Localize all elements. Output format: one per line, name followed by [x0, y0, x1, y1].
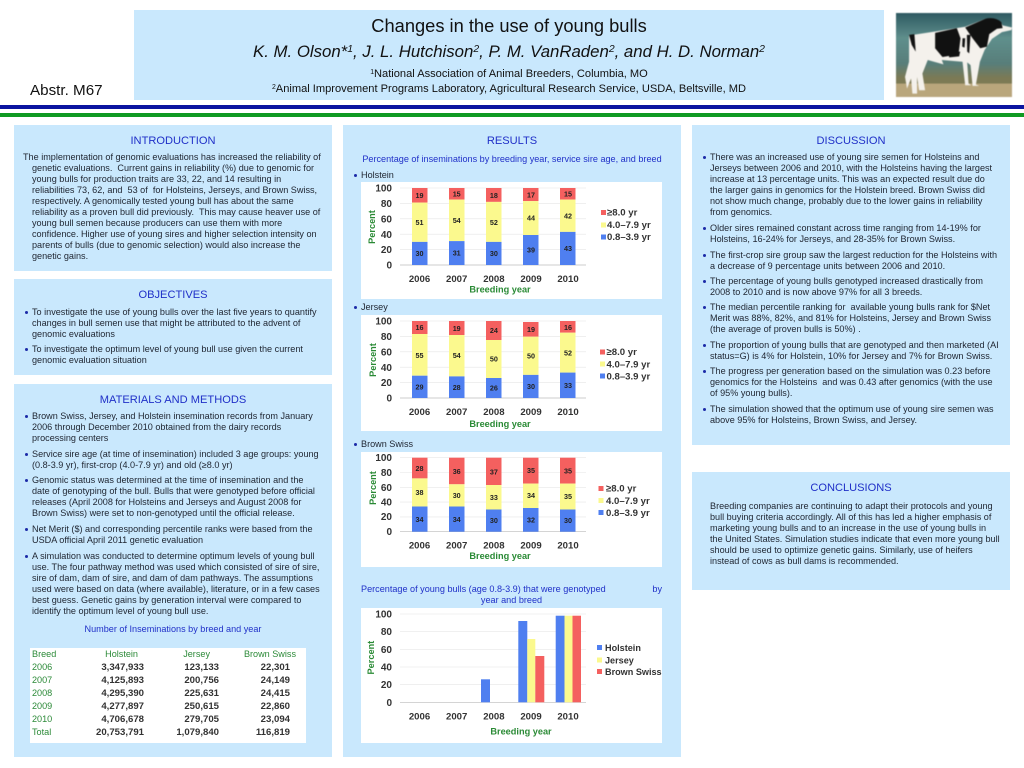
table: inseminations by breed and year — [30, 648, 306, 743]
stacked bar chart: Brown Swiss: 20 — [381, 512, 392, 523]
introduction text: reliability as a proven bull did previously. This may cause heaver use of — [32, 207, 320, 217]
method 5: A simulation was conducted to determine optimum levels of young bull — [32, 551, 315, 561]
table: inseminations by breed and year: 250,615 — [184, 701, 219, 712]
heading: discussion: DISCUSSION — [816, 135, 886, 147]
objective 2: genomic evaluation situation — [32, 355, 147, 365]
discussion point 1: not show much change, probably due to the lower gains in reliability — [710, 196, 982, 206]
stacked bar chart: Holstein: 52 — [490, 218, 498, 227]
introduction text — [23, 152, 321, 261]
header rule: green — [0, 113, 1024, 117]
panel: objectives — [14, 279, 332, 375]
discussion point 2: Holsteins, 16-24% for Jerseys, and 28-35% for Brown Swiss. — [710, 234, 955, 244]
stacked bar chart: Holstein: ≥8.0 yr — [607, 208, 638, 218]
introduction text: confidence. Higher use of young sires and higher selection intensity on — [32, 229, 317, 239]
stacked bar chart: Brown Swiss: 34 — [416, 515, 424, 524]
discussion point 1: There was an increased use of young sire semen for Holsteins and — [710, 152, 979, 162]
discussion point 1 — [710, 152, 992, 218]
stacked bar chart: Holstein: 15 — [453, 190, 461, 198]
panel: introduction — [14, 125, 332, 271]
method 5: sire of dam, dam of sire, and dam of dam pathways. The assumptions — [32, 573, 313, 583]
introduction text: respectively. A genomically tested young bull has about the same — [32, 196, 294, 206]
method 4 — [32, 524, 313, 546]
stacked bar chart: Holstein: 43 — [564, 244, 572, 253]
stacked bar chart: Jersey: 28 — [453, 383, 461, 392]
stacked bar chart: Brown Swiss: 100 — [375, 453, 392, 464]
stacked bar chart: Jersey: 54 — [453, 351, 461, 360]
stacked bar chart: Brown Swiss: 0 — [386, 527, 392, 538]
grouped bar chart: genotyped young bulls: 0 — [386, 698, 392, 709]
stacked bar chart: Holstein: 2010 — [557, 274, 579, 285]
discussion point 1: Jerseys between 2006 and 2010, with the Holsteins having the largest — [710, 163, 992, 173]
stacked bar chart: Holstein — [361, 182, 662, 299]
authors: K. M. Olson*1, J. L. Hutchison2, P. M. VanRaden2, and H. D. Norman2 — [253, 42, 765, 61]
stacked bar chart: Jersey: 60 — [381, 348, 392, 358]
stacked bar chart: Jersey: 50 — [527, 352, 535, 360]
table: inseminations by breed and year: Jersey — [183, 649, 210, 659]
method 2: Service sire age (at time of insemination) included 3 age groups: young — [32, 449, 319, 459]
table: inseminations by breed and year: 2008 — [32, 688, 52, 698]
stacked bar chart: Jersey: 33 — [564, 381, 572, 390]
stacked bar chart: Brown Swiss: 60 — [381, 483, 392, 494]
discussion point 5: (the average of proven bulls is 50%) . — [710, 324, 861, 334]
introduction text: young bull semen because producers can use them with more — [32, 218, 282, 228]
stacked bar chart: Jersey: 24 — [490, 326, 498, 335]
stacked bar chart: Brown Swiss: 40 — [381, 498, 392, 508]
stacked bar chart: Brown Swiss: 2008 — [483, 540, 505, 552]
stacked bar chart: Jersey: 29 — [416, 382, 424, 392]
stacked bar chart: Holstein: 15 — [564, 190, 572, 198]
stacked bar chart: Brown Swiss: 35 — [564, 466, 572, 476]
table: inseminations by breed and year: 4,706,678 — [101, 714, 144, 725]
method 3: date of genotyping of the bull. Bulls that were genotyped before official — [32, 486, 315, 496]
discussion point 2: Older sires remained constant across time ranging from 14-19% for — [710, 223, 981, 233]
stacked bar chart: Holstein: 30 — [490, 249, 498, 258]
table: inseminations by breed and year: 225,631 — [184, 688, 219, 699]
grouped bar chart: genotyped young bulls — [361, 608, 662, 743]
stacked bar chart: Jersey: 26 — [490, 384, 498, 392]
stacked bar chart: Holstein: 40 — [381, 230, 392, 241]
discussion point 3 — [710, 250, 997, 272]
method 5: identify the optimum level of young bull use. — [32, 606, 208, 616]
method 3: Genomic status was determined at the time of insemination and the — [32, 475, 303, 485]
stacked bar chart: Jersey: 16 — [564, 323, 572, 332]
stacked bar chart: Jersey: 40 — [381, 363, 392, 374]
grouped bar chart: genotyped young bulls: 2006 — [409, 712, 430, 722]
stacked bar chart: Holstein: Percent — [367, 210, 377, 244]
stacked bar chart: Brown Swiss: Percent — [368, 471, 378, 505]
stacked bar chart: Brown Swiss: ≥8.0 yr — [606, 484, 637, 494]
label: Brown Swiss: Brown Swiss — [361, 439, 413, 449]
grouped bar chart: genotyped young bulls: 2008 — [483, 712, 505, 722]
affiliation 1: 1National Association of Animal Breeders, Columbia, MO — [370, 68, 648, 80]
discussion point 4: 2008 to 2010 and is now above 97% for all 3 breeds. — [710, 287, 922, 297]
discussion point 5: The median percentile ranking for available young bulls rank for $Net — [710, 302, 990, 312]
stacked bar chart: Holstein: 18 — [490, 191, 498, 200]
grouped bar chart: genotyped young bulls: 2010 — [557, 712, 579, 722]
objective 2 — [32, 344, 303, 366]
table: inseminations by breed and year: 22,860 — [261, 701, 290, 712]
method 3: releases (April 2008 for Holsteins and Jerseys and August 2008 for — [32, 497, 301, 507]
table: inseminations by breed and year: 2007 — [32, 675, 52, 685]
heading: conclusions: CONCLUSIONS — [810, 482, 892, 494]
stacked bar chart: Brown Swiss: 36 — [453, 467, 461, 476]
stacked bar chart: Brown Swiss: 30 — [453, 491, 461, 500]
table: inseminations by breed and year: 2006 — [32, 662, 52, 672]
stacked bar chart: Holstein: 17 — [527, 190, 535, 200]
table: inseminations by breed and year: 20,753,791 — [96, 727, 144, 738]
table: inseminations by breed and year: Brown Swiss — [244, 649, 296, 659]
stacked bar chart: Brown Swiss: Breeding year — [469, 551, 531, 561]
stacked bar chart: Brown Swiss: 80 — [381, 468, 392, 479]
caption: genotyped chart: year and breed — [481, 595, 542, 605]
discussion point 4 — [710, 276, 983, 298]
stacked bar chart: Jersey: 2007 — [446, 407, 467, 418]
stacked bar chart: Holstein: 2007 — [446, 274, 467, 285]
header panel — [134, 10, 884, 100]
objective 1: To investigate the use of young bulls over the last five years to quantify — [32, 307, 317, 317]
table: inseminations by breed and year: 22,301 — [261, 662, 290, 673]
stacked bar chart: Brown Swiss: 38 — [416, 488, 424, 497]
caption: genotyped chart: by — [652, 584, 662, 594]
conclusions text — [710, 501, 1000, 566]
stacked bar chart: Holstein: 100 — [375, 184, 392, 194]
stacked bar chart: Jersey: 100 — [375, 316, 392, 328]
stacked bar chart: Holstein: 20 — [381, 245, 392, 256]
table: inseminations by breed and year: 24,415 — [261, 688, 290, 699]
stacked bar chart: Holstein: 60 — [381, 214, 392, 226]
grouped bar chart: genotyped young bulls: Brown Swiss — [605, 667, 662, 677]
stacked bar chart: Brown Swiss: 2009 — [520, 540, 542, 552]
discussion point 3: The first-crop sire group saw the largest reduction for the Holsteins with — [710, 250, 997, 260]
stacked bar chart: Jersey: 50 — [490, 354, 498, 364]
stacked bar chart: Holstein: 2009 — [520, 274, 542, 285]
method 2 — [32, 449, 319, 471]
stacked bar chart: Jersey: 55 — [416, 351, 424, 360]
stacked bar chart: Holstein: Breeding year — [469, 284, 531, 294]
table: inseminations by breed and year: 2010 — [32, 714, 52, 724]
stacked bar chart: Brown Swiss: 37 — [490, 468, 498, 476]
discussion point 1: from genomics. — [710, 207, 772, 217]
table: inseminations by breed and year: 2009 — [32, 701, 52, 711]
stacked bar chart: Holstein: 51 — [416, 218, 424, 227]
stacked bar chart: Jersey: Breeding year — [469, 419, 531, 429]
stacked bar chart: Holstein: 0 — [386, 260, 392, 272]
method 1: processing centers — [32, 433, 108, 443]
method 5: used were based on data (where available), literature, or in a few cases — [32, 584, 320, 594]
grouped bar chart: genotyped young bulls: 40 — [381, 662, 392, 674]
introduction text: genetic gains. — [32, 251, 88, 261]
discussion point 5: Merit was 88%, 82%, and 81% for Holsteins, Jersey and Brown Swiss — [710, 313, 991, 323]
stacked bar chart: Jersey: 19 — [527, 325, 535, 334]
stacked bar chart: Jersey — [361, 315, 662, 431]
method 5 — [32, 551, 320, 617]
stacked bar chart: Brown Swiss: 0.8–3.9 yr — [606, 508, 650, 519]
stacked bar chart: Brown Swiss — [361, 452, 662, 567]
stacked bar chart: Brown Swiss: 4.0–7.9 yr — [606, 496, 650, 507]
table: inseminations by breed and year: 4,277,897 — [101, 701, 144, 712]
stacked bar chart: Jersey: 0 — [386, 394, 392, 404]
stacked bar chart: Jersey: 2010 — [557, 407, 579, 418]
grouped bar chart: genotyped young bulls: 80 — [381, 627, 392, 638]
grouped bar chart: genotyped young bulls: 60 — [381, 645, 392, 656]
conclusions text: instead of cows as bull dams is recommended. — [710, 556, 899, 566]
discussion point 6 — [710, 340, 999, 362]
grouped bar chart: genotyped young bulls: Jersey — [605, 655, 635, 665]
grouped bar chart: genotyped young bulls: Holstein — [605, 643, 641, 653]
discussion point 8: The simulation showed that the optimum use of young sire semen was — [710, 404, 994, 414]
method 3 — [32, 475, 315, 519]
stacked bar chart: Brown Swiss: 2010 — [557, 540, 579, 552]
stacked bar chart: Holstein: 2006 — [409, 274, 430, 285]
stacked bar chart: Brown Swiss: 34 — [453, 515, 461, 524]
table: inseminations by breed and year: 200,756 — [184, 675, 219, 686]
grouped bar chart: genotyped young bulls: Breeding year — [490, 726, 552, 736]
stacked bar chart: Jersey: ≥8.0 yr — [606, 347, 637, 358]
title: Changes in the use of young bulls — [371, 15, 647, 36]
stacked bar chart: Jersey: 0.8–3.9 yr — [606, 372, 651, 382]
stacked bar chart: Brown Swiss: 35 — [527, 466, 535, 475]
introduction text: young bulls for production traits are 33, 22, and 14 resulting in — [32, 174, 281, 184]
discussion point 7: of 95% young bulls). — [710, 388, 792, 398]
stacked bar chart: Jersey: 4.0–7.9 yr — [606, 360, 651, 370]
table: inseminations by breed and year: 116,819 — [256, 727, 290, 738]
method 2: (0.8-3.9 yr), first-crop (4.0-7.9 yr) and old (≥8.0 yr) — [32, 460, 233, 470]
heading: results: RESULTS — [487, 135, 537, 147]
stacked bar chart: Holstein: 0.8–3.9 yr — [607, 232, 651, 243]
discussion point 8 — [710, 404, 994, 426]
conclusions text: marketing young bulls and to an increase in the use of young bulls in — [710, 523, 986, 533]
method 1: Brown Swiss, Jersey, and Holstein insemination records from January — [32, 411, 313, 421]
discussion point 1: increase at 13 percentage units. This was an expected result due do — [710, 174, 985, 184]
method 4: Net Merit ($) and corresponding percentile ranks were based from the — [32, 524, 313, 534]
table: inseminations by breed and year: 3,347,933 — [101, 662, 144, 673]
stacked bar chart: Brown Swiss: 2006 — [409, 540, 430, 552]
stacked bar chart: Brown Swiss: 28 — [416, 464, 424, 473]
table: inseminations by breed and year: 279,705 — [184, 714, 219, 725]
caption: inseminations chart: Percentage of inseminations by breeding year, service sire age, and breed — [362, 154, 662, 164]
stacked bar chart: Jersey: 2006 — [409, 407, 430, 418]
table: inseminations by breed and year: 4,295,390 — [101, 688, 144, 699]
stacked bar chart: Jersey: 52 — [564, 348, 572, 358]
method 5: best guess. Genetic gains by generation interval were compared to — [32, 595, 301, 605]
stacked bar chart: Jersey: 16 — [416, 323, 424, 332]
icon: photo of a Holstein bull — [896, 13, 1012, 97]
heading: objectives: OBJECTIVES — [138, 289, 208, 301]
stacked bar chart: Holstein: 31 — [453, 248, 461, 258]
panel: conclusions — [692, 472, 1010, 590]
discussion point 6: The proportion of young bulls that are genotyped and then marketed (AI — [710, 340, 999, 350]
method 5: use. The four pathway method was used which consisted of sire of sire, — [32, 562, 319, 572]
stacked bar chart: Brown Swiss: 33 — [490, 493, 498, 502]
stacked bar chart: Brown Swiss: 2007 — [446, 540, 467, 552]
header rule: blue — [0, 105, 1024, 109]
stacked bar chart: Jersey: 20 — [381, 378, 392, 389]
stacked bar chart: Holstein: 44 — [527, 214, 535, 222]
stacked bar chart: Jersey: 80 — [381, 332, 392, 343]
caption: genotyped chart — [361, 584, 662, 605]
stacked bar chart: Brown Swiss: 35 — [564, 492, 572, 501]
table: inseminations by breed and year: 123,133 — [184, 662, 219, 673]
discussion point 6: status=G) is 4% for Holstein, 10% for Jersey and 7% for Brown Swiss. — [710, 351, 992, 361]
conclusions text: should be used to optimize genetic gains. Similarly, use of heifers — [710, 545, 973, 555]
introduction text: parents of bulls (due to genomic selection) would also increase the — [32, 240, 300, 250]
heading: introduction: INTRODUCTION — [130, 135, 216, 147]
table: inseminations by breed and year: 23,094 — [261, 714, 290, 725]
stacked bar chart: Brown Swiss: 32 — [527, 516, 535, 524]
discussion point 8: above 95% for Holsteins, Brown Swiss, and Jersey. — [710, 415, 917, 425]
caption: genotyped chart: Percentage of young bulls (age 0.8-3.9) that were genotyped — [361, 584, 606, 594]
method 1: 2006 through December 2010 obtained from the dairy records — [32, 422, 281, 432]
stacked bar chart: Holstein: 19 — [416, 191, 424, 200]
stacked bar chart: Holstein: 2008 — [483, 274, 505, 285]
discussion point 3: a decrease of 9 percentage units between 2006 and 2010. — [710, 261, 945, 271]
grouped bar chart: genotyped young bulls: Percent — [366, 641, 376, 674]
introduction text: The implementation of genomic evaluations has increased the reliability of — [23, 152, 321, 162]
heading: materials and methods: MATERIALS AND METHODS — [100, 394, 246, 406]
label: Holstein: Holstein — [361, 170, 394, 180]
table caption: Number of Inseminations by breed and year — [85, 624, 261, 634]
objective 1: genomic evaluations — [32, 329, 115, 339]
panel: discussion — [692, 125, 1010, 445]
grouped bar chart: genotyped young bulls: 2009 — [520, 712, 542, 722]
table: inseminations by breed and year: 1,079,840 — [176, 727, 219, 738]
grouped bar chart: genotyped young bulls: 2007 — [446, 712, 467, 722]
stacked bar chart: Holstein: 80 — [381, 199, 392, 210]
grouped bar chart: genotyped young bulls: 20 — [381, 680, 392, 691]
table: inseminations by breed and year: Breed — [32, 649, 56, 659]
panel: materials and methods — [14, 384, 332, 757]
table: inseminations by breed and year: 24,149 — [261, 675, 290, 686]
objective 1 — [32, 307, 317, 340]
stacked bar chart: Brown Swiss: 30 — [564, 516, 572, 525]
discussion point 1: the larger gains in genomics for the Holstein breed. Brown Swiss did — [710, 185, 985, 195]
stacked bar chart: Brown Swiss: 34 — [527, 491, 535, 500]
label: Jersey: Jersey — [361, 302, 388, 312]
stacked bar chart: Brown Swiss: 30 — [490, 516, 498, 525]
objective 2: To investigate the optimum level of young bull use given the current — [32, 344, 303, 354]
conclusions text: the United States. Simulation studies indicate that even more young bull — [710, 534, 1000, 544]
table: inseminations by breed and year: Holstein — [105, 649, 138, 659]
stacked bar chart: Jersey: Percent — [368, 343, 378, 377]
stacked bar chart: Jersey: 2008 — [483, 407, 505, 418]
discussion point 7 — [710, 366, 993, 399]
panel: results — [343, 125, 681, 757]
table: inseminations by breed and year: Total — [32, 727, 51, 737]
conclusions text: Breeding companies are continuing to adapt their protocols and young — [710, 501, 993, 511]
stacked bar chart: Jersey: 2009 — [520, 407, 542, 418]
method 4: USDA official April 2011 genetic evaluation — [32, 535, 203, 545]
conclusions text: bull buying criteria accordingly. All of this has led a higher emphasis of — [710, 512, 991, 522]
introduction text: genetic evaluations. Current gains in reliability (%) due to genomic for — [32, 163, 314, 173]
stacked bar chart: Jersey: 19 — [453, 324, 461, 333]
stacked bar chart: Jersey: 30 — [527, 382, 535, 391]
method 1 — [32, 411, 313, 444]
introduction text: reliabilities 73, 62, and 53 of for Holsteins, Jerseys, and Brown Swiss, — [32, 185, 317, 195]
stacked bar chart: Holstein: 4.0–7.9 yr — [607, 220, 651, 231]
method 3: Brown Swiss) were set to non-genotyped until the official release. — [32, 508, 295, 518]
stacked bar chart: Holstein: 39 — [527, 246, 535, 254]
objective 1: changes in bull semen use that might be attributed to the advent of — [32, 318, 300, 328]
affiliation 2: 2Animal Improvement Programs Laboratory, Agricultural Research Service, USDA, Beltsville, MD — [272, 83, 746, 95]
stacked bar chart: Holstein: 42 — [564, 212, 572, 220]
stacked bar chart: Holstein: 54 — [453, 216, 461, 225]
grouped bar chart: genotyped young bulls: 100 — [375, 610, 392, 620]
table: inseminations by breed and year: 4,125,893 — [101, 675, 144, 686]
discussion point 5 — [710, 302, 991, 335]
discussion point 4: The percentage of young bulls genotyped increased drastically from — [710, 276, 983, 286]
abstract number: Abstr. M67 — [30, 82, 103, 99]
discussion point 7: genomics for the Holsteins and was 0.43 after genomics (with the use — [710, 377, 993, 387]
discussion point 7: The progress per generation based on the simulation was 0.23 before — [710, 366, 991, 376]
stacked bar chart: Holstein: 30 — [416, 249, 424, 258]
discussion point 2 — [710, 223, 981, 245]
